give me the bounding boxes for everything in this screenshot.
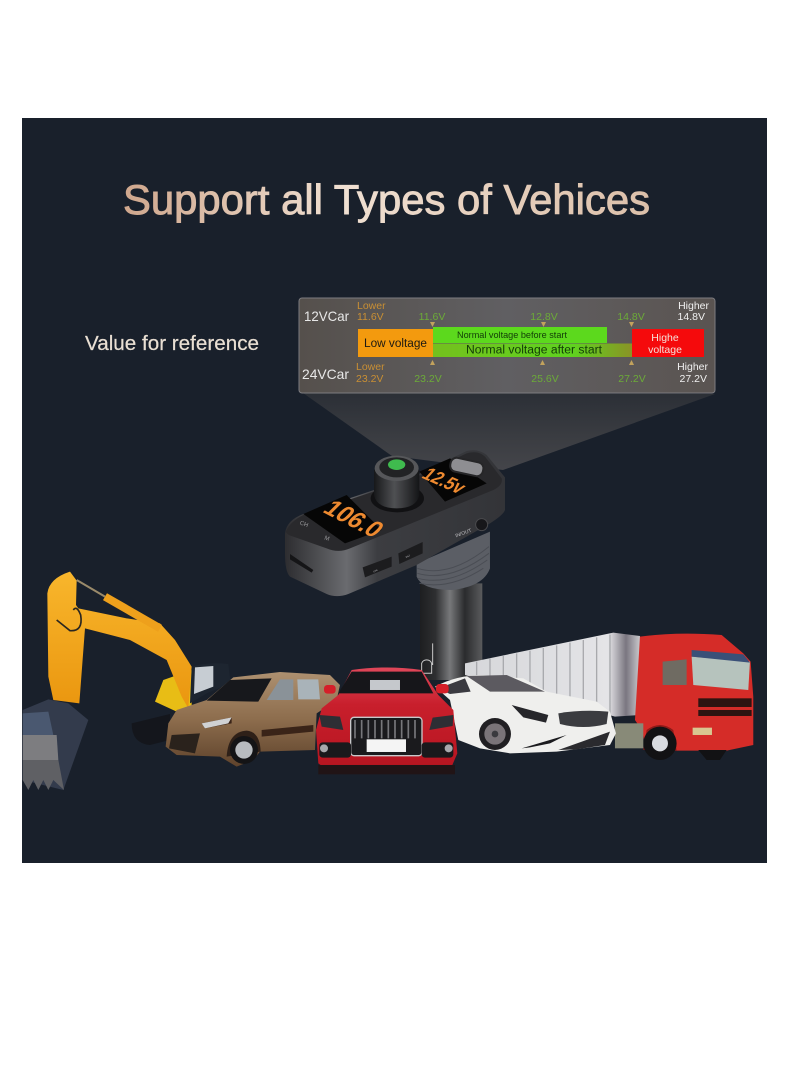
MPV bumper (169, 733, 200, 753)
in/out port label: IN/OUT (455, 528, 473, 539)
excavator bucket (23, 699, 88, 790)
speaker grille (449, 457, 485, 477)
button labels: M (323, 536, 330, 543)
audio jack (476, 519, 488, 531)
truck cab (615, 634, 753, 760)
lower 12V value (357, 300, 386, 323)
higher 12V value: Higher (678, 300, 709, 312)
panel: voltage chart (299, 298, 715, 393)
top scale values: 14.8V (617, 311, 645, 323)
vehicle: brown MPV (166, 672, 340, 767)
row label: 12V car: 12VCar (304, 308, 349, 324)
scale markers (430, 322, 634, 365)
MPV trim (202, 717, 313, 737)
screen: voltage display: 12.5v (417, 464, 470, 498)
bar: high voltage (632, 329, 704, 357)
white coupe (435, 675, 616, 753)
top scale values (419, 311, 645, 323)
MPV windows (207, 678, 320, 702)
lower 12V value: Lower (357, 300, 386, 312)
button labels (299, 521, 330, 543)
screen: frequency display: 106.0 (317, 496, 390, 542)
higher 12V value (678, 300, 709, 323)
bar: high voltage: Highe (651, 332, 679, 344)
bottom scale values: 25.6V (531, 373, 559, 385)
projection beam (303, 393, 715, 470)
trailer ribs (477, 635, 610, 714)
row label: 24V car: 24VCar (302, 366, 349, 382)
excavator cab and track (132, 663, 231, 745)
lower 12V value: 11.6V (357, 311, 384, 323)
lower 24V value: Lower (356, 361, 385, 373)
card slot (290, 554, 313, 573)
bar: normal voltage before start: Normal voltage before start (457, 330, 567, 341)
bar: normal voltage after start: Normal voltage after start (466, 344, 603, 356)
bottom scale values (414, 373, 646, 385)
hydraulic cylinders (57, 580, 160, 631)
threaded collar (417, 532, 490, 590)
knob (371, 456, 424, 512)
device: car FM transmitter (285, 450, 505, 680)
higher 24V value: Higher (677, 361, 708, 373)
bar: normal voltage after start (433, 344, 632, 357)
top face (286, 452, 502, 551)
bottom scale values: 27.2V (618, 373, 646, 385)
MPV wheel (227, 731, 261, 764)
top scale values: 11.6V (419, 311, 445, 323)
bottom scale values: 23.2V (414, 373, 442, 385)
transmitter body (285, 450, 505, 596)
lower 24V value (356, 361, 385, 385)
bar: low voltage: Low voltage (364, 338, 427, 350)
label: value for reference: Value for reference (85, 333, 259, 355)
excavator boom (47, 572, 192, 708)
skip buttons: ⏮ (373, 568, 379, 575)
red SUV (316, 667, 457, 774)
top scale values: 12.8V (530, 311, 558, 323)
MPV headlight (202, 717, 232, 728)
higher 24V value (677, 361, 708, 385)
dark background panel (22, 118, 767, 863)
bar: normal voltage before start (433, 327, 607, 343)
skip buttons: ⏭ (405, 553, 411, 560)
higher 24V value: 27.2V (680, 373, 707, 385)
title: Support all Types of Vehices (123, 176, 650, 223)
higher 12V value: 14.8V (678, 311, 705, 323)
lower 24V value: 23.2V (356, 373, 383, 385)
truck trailer (465, 633, 640, 717)
skip buttons (363, 542, 423, 577)
vehicle: excavator (23, 572, 231, 790)
bar: low voltage (358, 329, 433, 357)
vehicle: red SUV, white coupe, truck (316, 633, 753, 774)
plug shaft (420, 583, 482, 680)
button labels: CH (299, 521, 309, 529)
bar: high voltage: voltage (648, 344, 682, 356)
